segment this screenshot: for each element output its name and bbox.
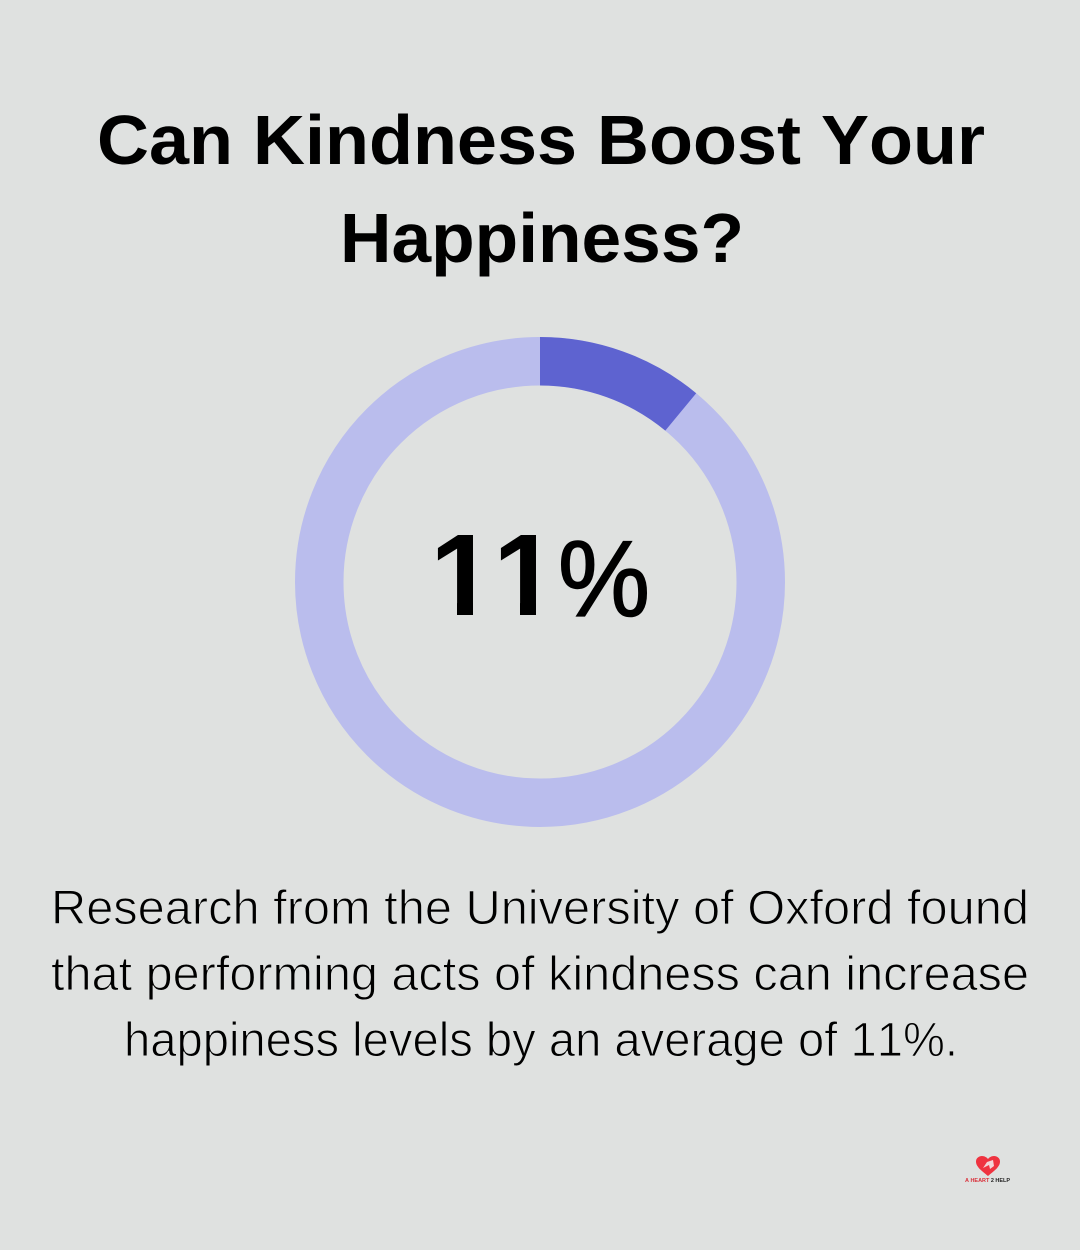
donut value: 1 (430, 510, 495, 640)
donut value: 1 (493, 510, 558, 640)
logo wordmark: A HEART 2 HELP (965, 1178, 1010, 1184)
icon: hand (983, 1160, 994, 1169)
icon: heart (976, 1156, 1000, 1176)
donut value (438, 535, 647, 618)
title (97, 101, 985, 277)
description text: Research from the University of Oxford found (51, 882, 1029, 935)
donut track (319, 361, 761, 803)
description text: happiness levels by an average of 11%. (124, 1014, 958, 1067)
logo: A Heart 2 Help (965, 1156, 1010, 1184)
description text: that performing acts of kindness can increase (51, 948, 1029, 1001)
title: Happiness? (340, 199, 744, 277)
title: Can Kindness Boost Your (97, 101, 985, 179)
donut highlighted segment (540, 337, 696, 431)
donut chart: 11% (319, 337, 761, 803)
donut value: % (558, 518, 650, 639)
description text (51, 882, 1029, 1067)
